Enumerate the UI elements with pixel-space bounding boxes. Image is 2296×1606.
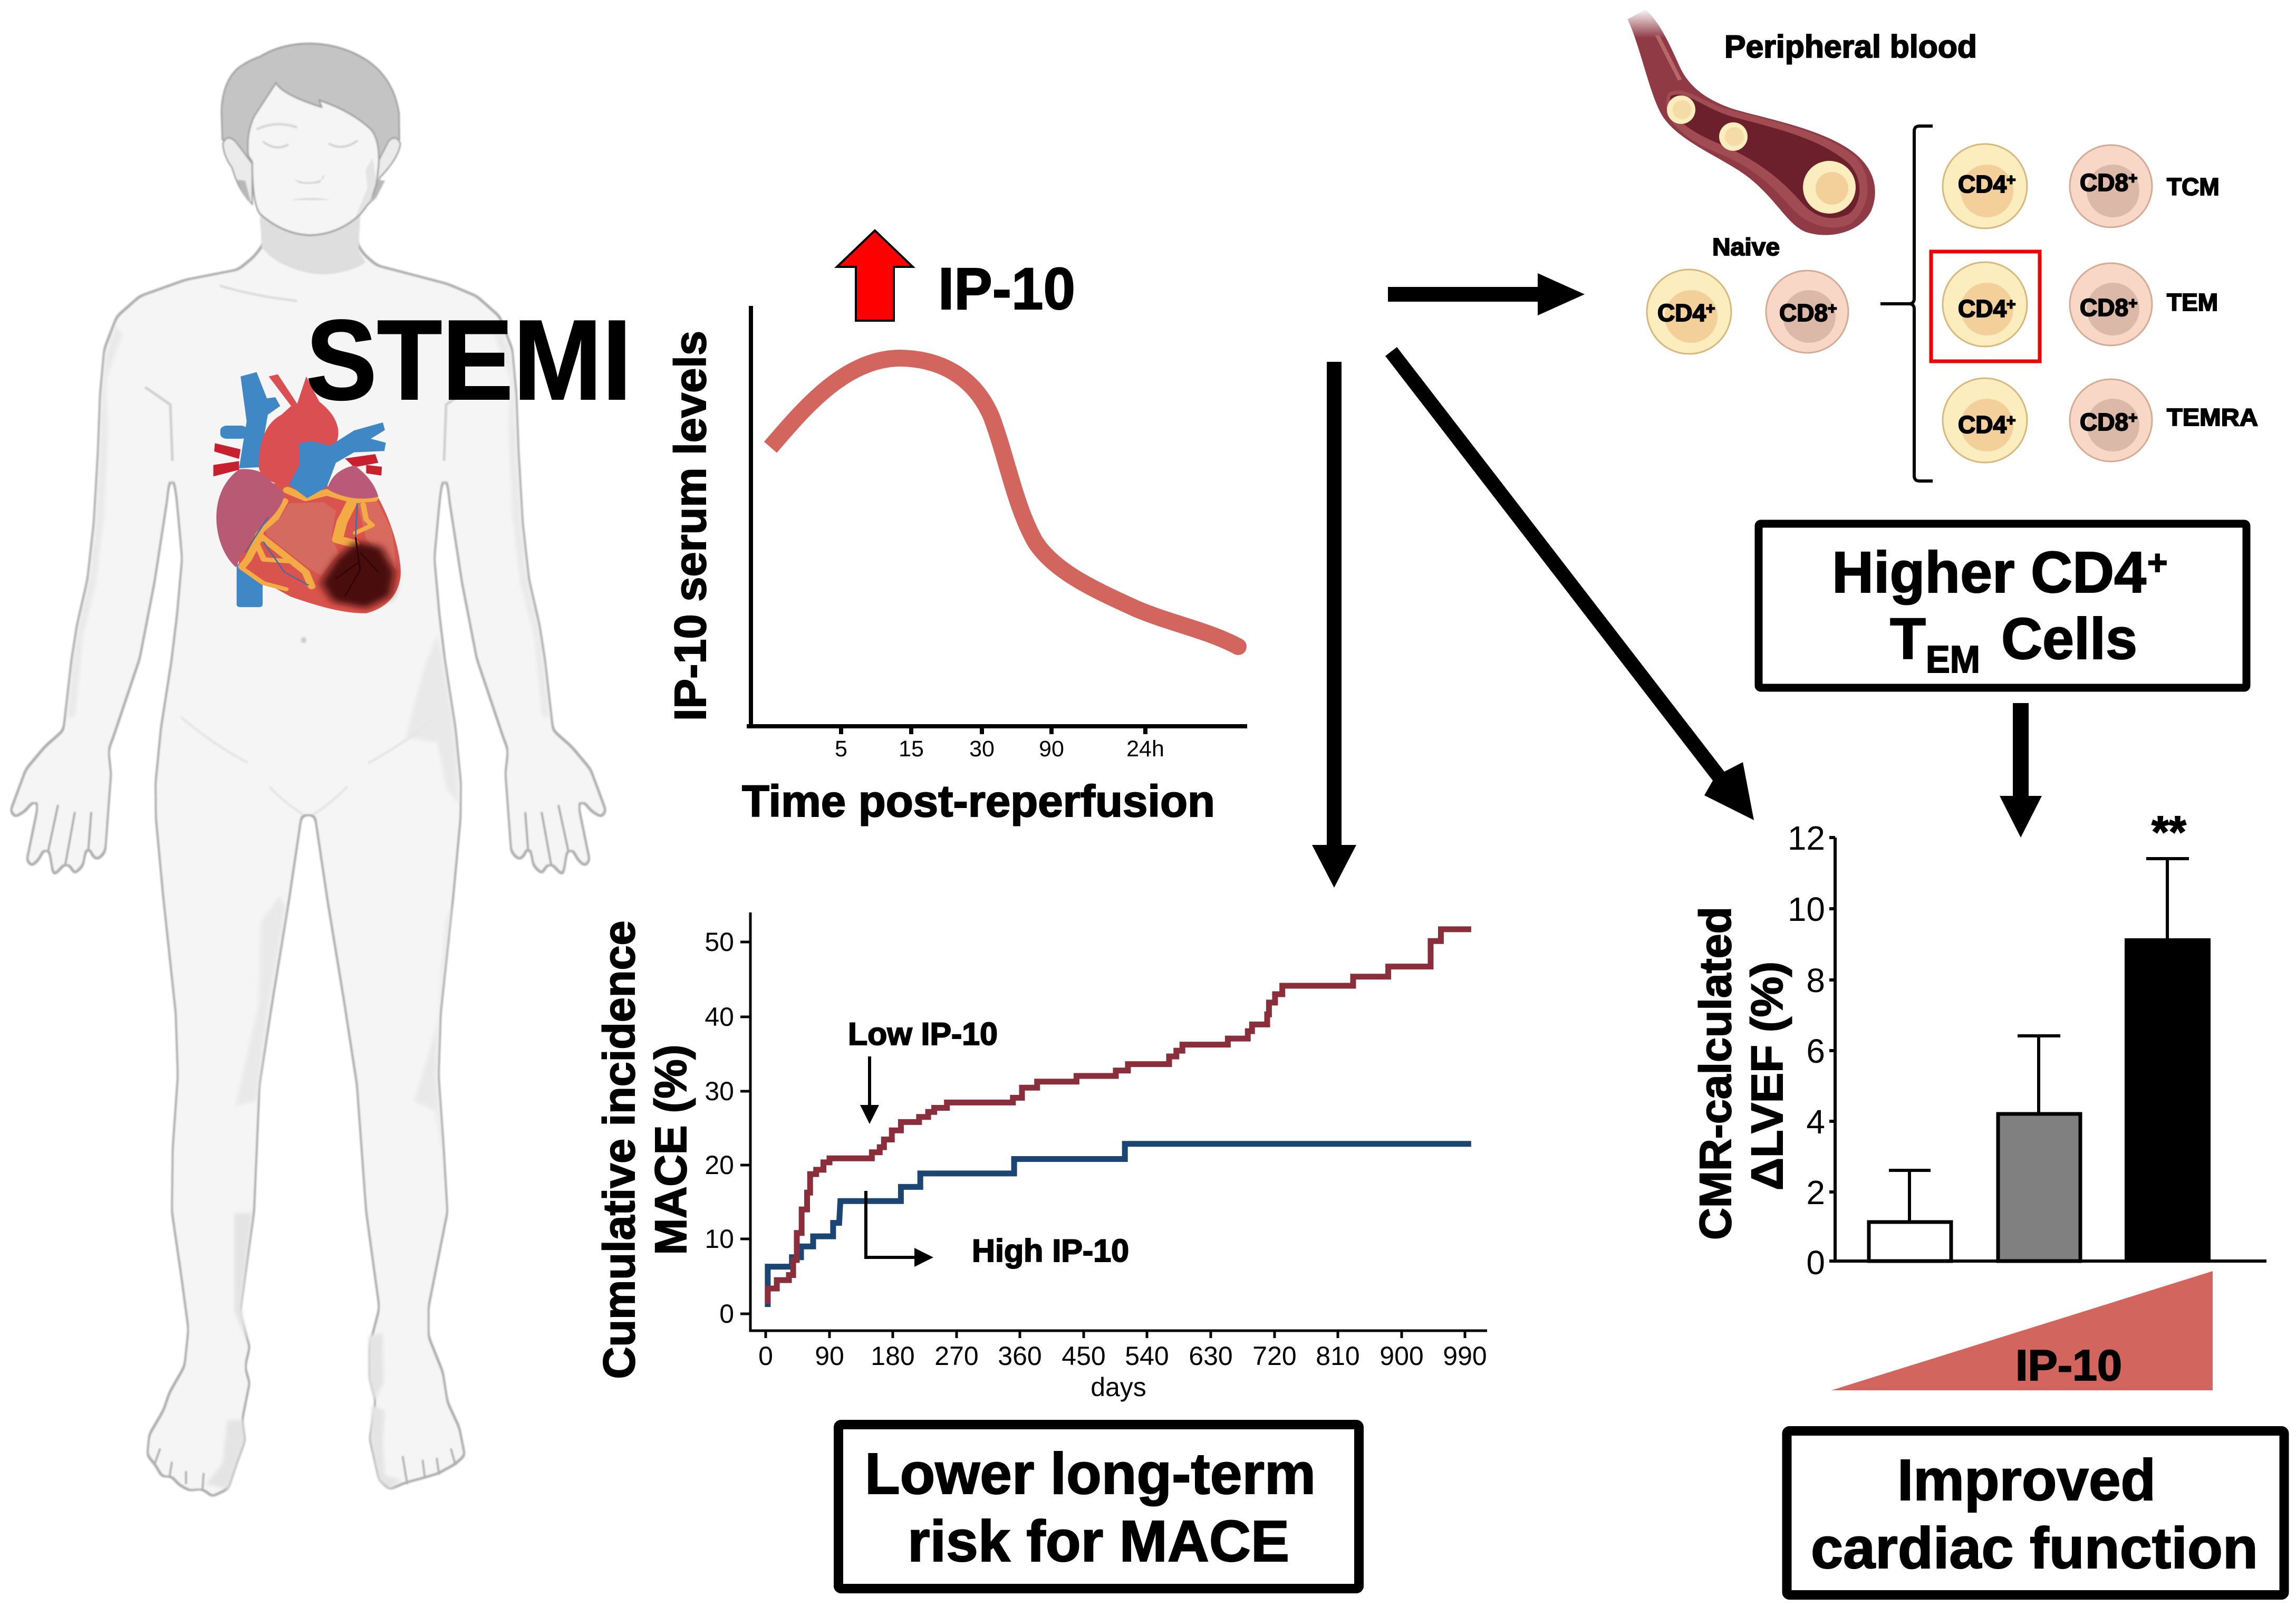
body creases: [49, 387, 568, 865]
TEM CD8 cell: [2070, 263, 2152, 345]
naive CD4 cell: [1647, 270, 1731, 354]
TCM CD4 cell: CD4: [1958, 170, 2006, 198]
TCM CD4 cell: +: [2006, 171, 2016, 189]
label high IP-10: High IP-10: [972, 1233, 1129, 1268]
box: improved cardiac function: Improved: [1897, 1448, 2156, 1513]
box: lower long-term risk: Lower long-term: [865, 1441, 1316, 1506]
y tick labels: 40: [705, 1002, 734, 1032]
panel: MACE cumulative incidence chart: [594, 912, 1487, 1402]
bar low: [1869, 1222, 1951, 1261]
TEMRA CD4 cell: +: [2006, 412, 2016, 429]
bracket: [1880, 126, 1933, 481]
time tick labels: 15: [899, 736, 924, 762]
right atrium: [216, 469, 284, 568]
vena cava and branches: [220, 372, 280, 607]
y tick labels: [1788, 819, 1825, 1282]
pulmonary vessels red: [214, 443, 382, 476]
bar high: [2125, 938, 2211, 1261]
left atrium: [327, 466, 378, 498]
y tick labels: 0: [1806, 1244, 1825, 1282]
panel: IP-10 time course: [665, 230, 1247, 826]
x tick labels: 360: [998, 1341, 1042, 1371]
toe creases: [154, 1448, 456, 1490]
x tick labels: 90: [815, 1341, 844, 1371]
coronary vessels: [245, 503, 357, 585]
heart with infarct: [214, 372, 401, 613]
naive CD8 cell: [1766, 271, 1848, 353]
naive CD8 cell: +: [1828, 300, 1837, 318]
TEMRA CD8 cell: [2070, 379, 2152, 461]
y tick labels: 4: [1806, 1103, 1825, 1141]
TCM CD8 cell: CD8: [2080, 169, 2128, 196]
y tick labels: 30: [705, 1076, 734, 1106]
x tick labels: 270: [934, 1341, 979, 1371]
x tick labels: 540: [1125, 1341, 1169, 1371]
TEM CD8 cell: +: [2128, 295, 2138, 312]
y axis title: CMR-calculated: [1691, 907, 1740, 1240]
low IP-10 curve: [768, 929, 1471, 1304]
axes and ticks: [740, 912, 1487, 1338]
arrow: to cardiac function: [1385, 347, 1754, 820]
arrow low IP-10: [860, 1056, 879, 1124]
TEMRA CD4 cell: CD4: [1958, 411, 2006, 438]
x tick labels: [758, 1341, 1487, 1371]
box: higher CD4 TEM cells: [1759, 524, 2246, 688]
infarct zone: [321, 542, 395, 608]
body shading: [67, 325, 549, 1489]
x tick labels: 720: [1252, 1341, 1297, 1371]
TEMRA CD8 cell: +: [2128, 409, 2138, 427]
y tick labels: 6: [1806, 1032, 1825, 1070]
box: higher CD4 TEM cells: T: [1890, 607, 1926, 671]
pulmonary artery: [289, 422, 386, 498]
subset label TEM: TEM: [2167, 288, 2218, 316]
y tick labels: 12: [1788, 819, 1825, 857]
y tick labels: 10: [705, 1224, 734, 1254]
IP-10 gradient triangle: [1831, 1271, 2213, 1390]
box: lower long-term risk: [838, 1425, 1359, 1589]
significance stars: **: [2152, 807, 2186, 857]
x tick labels: 990: [1443, 1341, 1487, 1371]
subset label TEMRA: TEMRA: [2167, 403, 2258, 431]
box: improved cardiac function: cardiac function: [1811, 1516, 2258, 1581]
TCM CD8 cell: [2070, 145, 2152, 227]
human body illustration: [9, 44, 607, 1498]
y tick labels: [705, 927, 734, 1329]
y tick labels: 0: [719, 1299, 734, 1329]
label low IP-10: Low IP-10: [848, 1016, 998, 1052]
serum curve: [770, 358, 1238, 647]
y axis title second line: MACE (%): [646, 1044, 696, 1255]
lateral wall: [357, 500, 397, 570]
time tick labels: 5: [835, 736, 847, 762]
title: STEMI: STEMI: [306, 296, 632, 424]
box: higher CD4 TEM cells: Higher CD4: [1832, 540, 2146, 605]
ventricle: [238, 483, 401, 613]
TEMRA CD4 cell: [1943, 378, 2027, 463]
subset label TCM: TCM: [2167, 173, 2220, 200]
time tick labels: 90: [1039, 736, 1064, 762]
arrow: to MACE chart: [1312, 362, 1356, 888]
red up arrow: [837, 230, 913, 321]
head: [220, 44, 400, 301]
axes: [747, 306, 1247, 734]
TEM CD8 cell: CD8: [2080, 294, 2128, 321]
panel: peripheral blood cells: [1627, 9, 2258, 481]
x tick labels: 630: [1189, 1341, 1233, 1371]
y axis title: IP-10 serum levels: [665, 331, 715, 721]
aorta: [259, 374, 338, 486]
x tick labels: 180: [871, 1341, 915, 1371]
naive CD4 cell: +: [1706, 300, 1715, 318]
box: higher CD4 TEM cells: Cells: [2001, 607, 2137, 671]
naive CD8 cell: CD8: [1779, 299, 1828, 326]
y axis title second line: ΔLVEF (%): [1742, 961, 1792, 1190]
TCM CD4 cell: [1943, 144, 2027, 228]
label IP-10: IP-10: [2015, 1341, 2122, 1390]
TEM CD4 cell: [1943, 262, 2027, 347]
time tick labels: 30: [969, 736, 995, 762]
box: higher CD4 TEM cells: EM: [1926, 639, 1980, 681]
y tick labels: 20: [705, 1150, 734, 1180]
label naive: Naive: [1712, 233, 1780, 261]
x tick labels: 900: [1379, 1341, 1424, 1371]
x tick labels: 810: [1316, 1341, 1360, 1371]
arrow: to peripheral blood: [1388, 273, 1585, 315]
y axis title: Cumulative incidence: [594, 921, 644, 1379]
naive CD4 cell: CD4: [1657, 299, 1706, 326]
x axis title: Time post-reperfusion: [742, 776, 1215, 826]
body silhouette: [9, 214, 607, 1498]
TEMRA CD8 cell: CD8: [2080, 408, 2128, 436]
time tick labels: 24h: [1126, 736, 1164, 762]
time tick labels: [835, 736, 1164, 762]
TCM CD8 cell: +: [2128, 170, 2138, 187]
y tick labels: 8: [1806, 961, 1825, 999]
x axis title days: days: [1091, 1372, 1146, 1402]
y tick labels: 50: [705, 927, 734, 957]
blood vessel icon: [1627, 9, 1875, 235]
arrow: CD4 TEM to bar chart: [2000, 703, 2042, 838]
box: improved cardiac function: [1787, 1431, 2284, 1595]
error bars: [1889, 859, 2189, 1222]
heading peripheral blood: Peripheral blood: [1724, 29, 1977, 64]
axes: [1829, 838, 2266, 1261]
high IP-10 curve: [768, 1144, 1471, 1307]
coronary fat: [242, 490, 374, 589]
box: higher CD4 TEM cells: +: [2147, 543, 2168, 582]
arrow high IP-10: [866, 1191, 933, 1267]
TEM CD4 cell: +: [2006, 296, 2016, 313]
TEM CD4 cell: CD4: [1958, 295, 2006, 322]
red highlight box: [1931, 252, 2040, 361]
x tick labels: 450: [1062, 1341, 1106, 1371]
anterior wall: [263, 502, 339, 575]
y tick labels: 10: [1788, 890, 1825, 928]
heading IP-10: IP-10: [938, 256, 1075, 322]
box: lower long-term risk: risk for MACE: [908, 1509, 1289, 1574]
panel: LVEF bar chart: [1691, 807, 2266, 1390]
y tick labels: 2: [1806, 1174, 1825, 1211]
bar mid: [1998, 1114, 2080, 1261]
x tick labels: 0: [758, 1341, 773, 1371]
